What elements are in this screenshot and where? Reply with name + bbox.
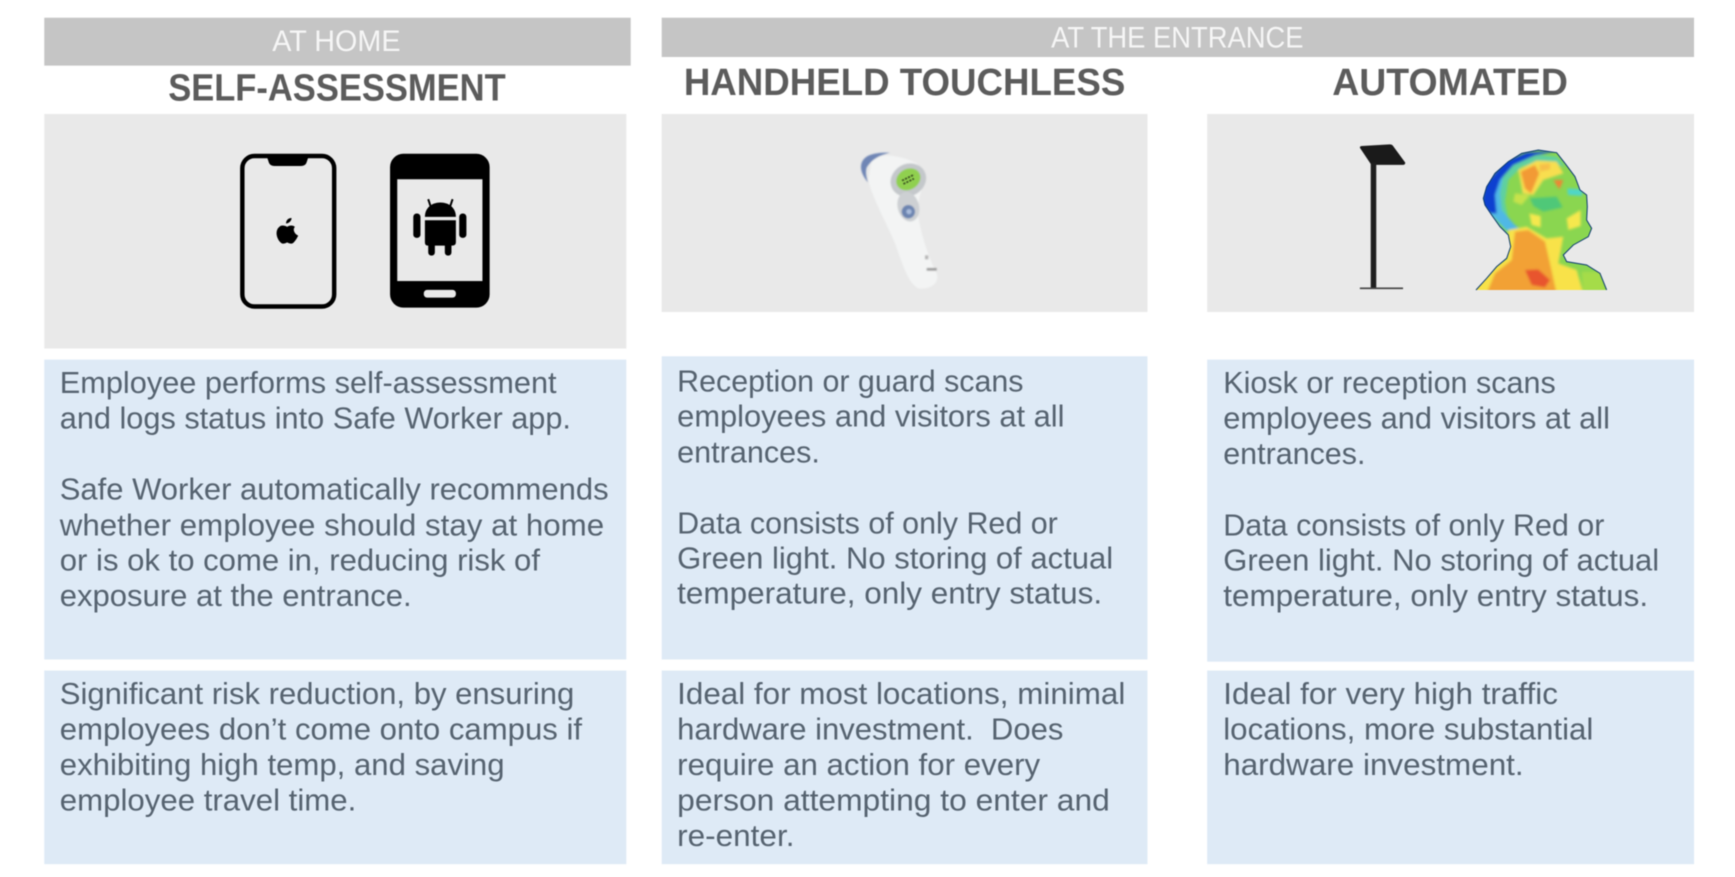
panel: handheld description: [662, 356, 1147, 659]
panel: handheld benefit: require an action for every: [677, 747, 1041, 782]
panel: self-assessment benefit: [44, 671, 626, 864]
icon: handheld thermometer: [861, 153, 937, 289]
panel: at home banner: [44, 18, 631, 66]
panel: handheld description: temperature, only entry status.: [677, 576, 1102, 611]
panel: handheld description: employees and visitors at all: [677, 399, 1064, 434]
panel: self-assessment benefit: employee travel time.: [60, 782, 356, 817]
panel: self-assessment image: [44, 114, 626, 349]
panel: automated description: entrances.: [1223, 436, 1365, 471]
panel: self-assessment description: or is ok to come in, reducing risk of: [60, 542, 540, 577]
panel: automated benefit: Ideal for very high traffic: [1223, 676, 1558, 711]
panel: handheld description: Green light. No storing of actual: [677, 541, 1113, 576]
panel: self-assessment description: whether employee should stay at home: [59, 508, 604, 543]
panel: handheld description: Reception or guard scans: [677, 364, 1024, 399]
icon: thermal head image: [1475, 148, 1608, 291]
icon: kiosk stand: [1360, 144, 1405, 289]
panel: handheld description: Data consists of only Red or: [677, 505, 1058, 540]
panel: self-assessment benefit: exhibiting high temp, and saving: [60, 747, 505, 782]
panel: self-assessment description: [44, 360, 626, 659]
panel: self-assessment description: Safe Worker automatically recommends: [60, 472, 609, 507]
panel: handheld image: [662, 114, 1147, 312]
panel: automated description: [1207, 360, 1694, 662]
panel: automated benefit: hardware investment.: [1223, 747, 1524, 782]
panel: handheld benefit: Ideal for most locations, minimal: [677, 676, 1125, 711]
icon: iphone: [242, 156, 334, 306]
panel: handheld benefit: hardware investment. Does: [677, 711, 1063, 746]
panel: automated description: Kiosk or reception scans: [1223, 365, 1556, 400]
panel: handheld description: entrances.: [677, 435, 820, 470]
panel: automated description: Data consists of only Red or: [1223, 508, 1604, 543]
panel: self-assessment benefit: employees don’t come onto campus if: [60, 711, 582, 746]
panel: automated image: [1207, 114, 1694, 312]
panel: self-assessment benefit: Significant risk reduction, by ensuring: [60, 676, 574, 711]
panel: automated description: employees and visitors at all: [1223, 401, 1610, 436]
panel: self-assessment description: and logs status into Safe Worker app.: [60, 401, 571, 436]
panel: at home banner: AT HOME: [272, 25, 401, 58]
panel: automated benefit: locations, more substantial: [1223, 711, 1593, 746]
heading: self-assessment: SELF-ASSESSMENT: [168, 67, 506, 109]
panel: automated description: temperature, only entry status.: [1223, 578, 1648, 613]
panel: automated description: Green light. No storing of actual: [1223, 542, 1659, 577]
icon: android phone: [390, 154, 490, 308]
panel: self-assessment description: Employee performs self-assessment: [60, 365, 557, 400]
panel: handheld benefit: re-enter.: [677, 818, 794, 853]
heading: automated: AUTOMATED: [1332, 61, 1568, 103]
heading: handheld touchless: HANDHELD TOUCHLESS: [684, 61, 1125, 103]
panel: handheld benefit: person attempting to enter and: [677, 782, 1110, 817]
panel: automated benefit: [1207, 671, 1694, 864]
panel: handheld benefit: [662, 671, 1147, 864]
panel: self-assessment description: exposure at the entrance.: [60, 578, 412, 613]
panel: at the entrance banner: AT THE ENTRANCE: [1051, 22, 1303, 55]
panel: at the entrance banner: [662, 18, 1694, 57]
